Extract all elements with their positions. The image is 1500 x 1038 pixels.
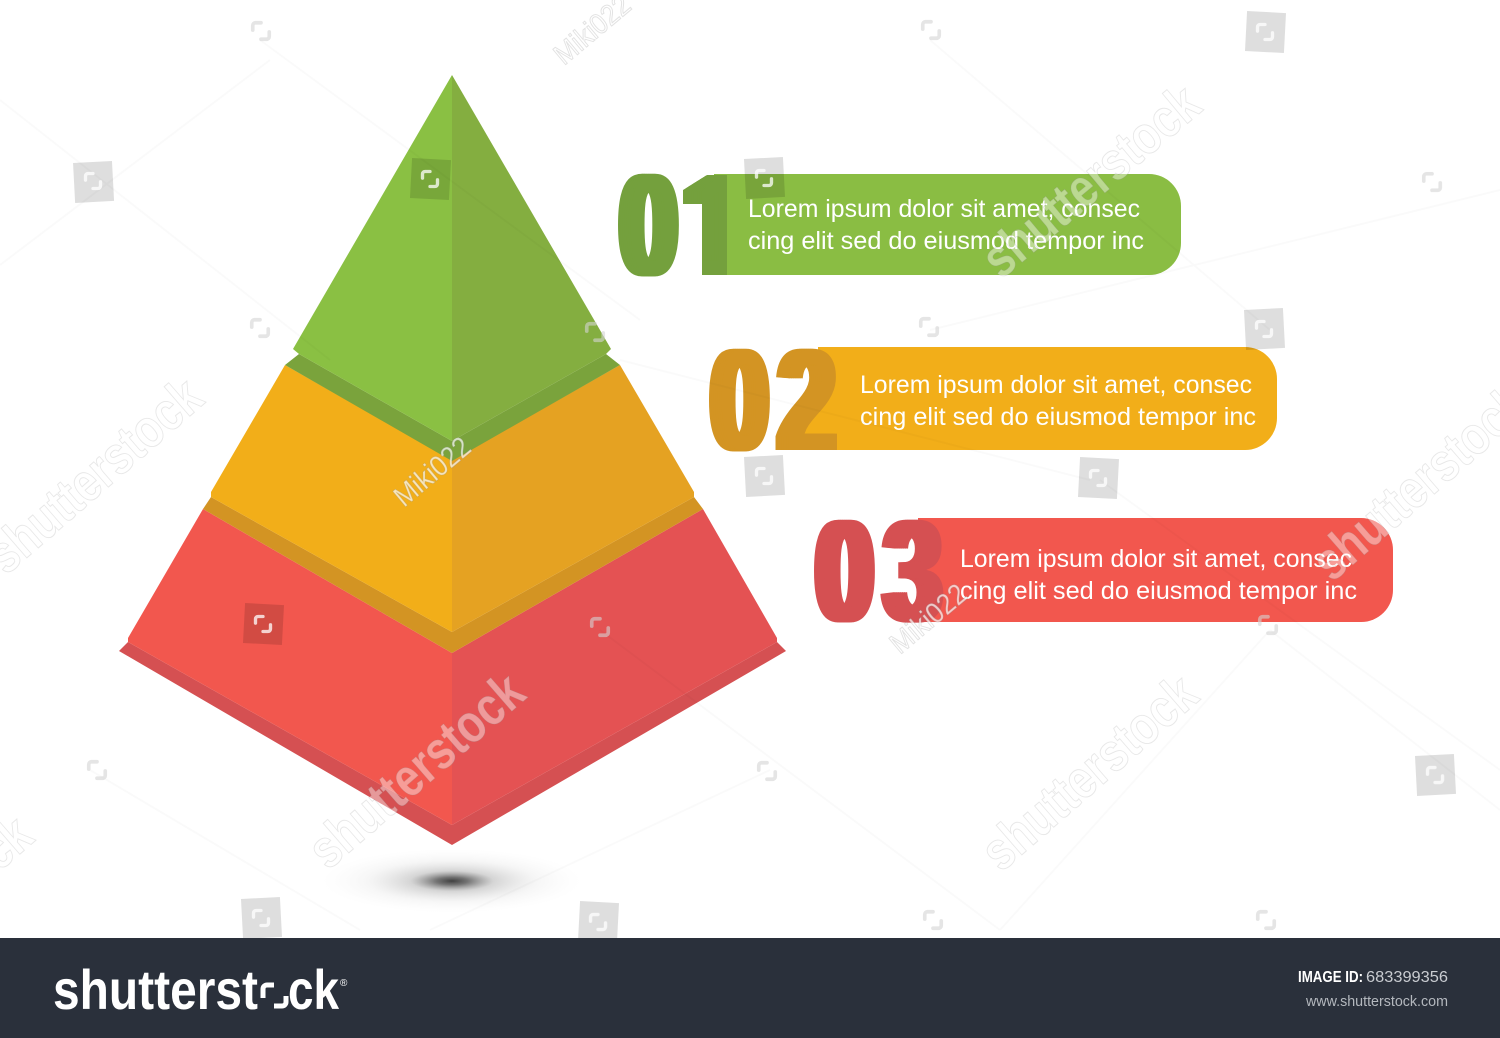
website: www.shutterstock.com xyxy=(1305,993,1448,1010)
watermarks: Miki022 xyxy=(884,578,973,660)
number 02 xyxy=(705,319,841,481)
number 03: 0 xyxy=(810,490,866,652)
footer bar xyxy=(0,938,1500,1038)
number 02: 2 xyxy=(772,319,828,481)
text: Lorem ipsum dolor sit amet, consec xyxy=(860,371,1252,399)
bar xyxy=(714,174,1181,275)
watermarks: shutterstock xyxy=(297,660,536,880)
text: cing elit sed do eiusmod tempor inc xyxy=(960,577,1357,605)
tier 3: red base xyxy=(119,509,786,845)
tier 1: green top xyxy=(285,75,620,461)
text: cing elit sed do eiusmod tempor inc xyxy=(748,227,1144,255)
watermarks: shutterstock xyxy=(970,662,1209,882)
text: Lorem ipsum dolor sit amet, consec xyxy=(748,195,1140,223)
shutterstock logo: shutterst xyxy=(53,958,258,1021)
image id: IMAGE ID: xyxy=(1298,969,1363,986)
floor shadow xyxy=(322,849,582,913)
pyramid xyxy=(119,75,786,913)
number 03 xyxy=(810,490,947,652)
bar xyxy=(918,518,1393,622)
text: cing elit sed do eiusmod tempor inc xyxy=(860,403,1256,431)
number 01: 0 xyxy=(614,144,670,306)
tier 2: orange xyxy=(203,365,703,653)
number 01 xyxy=(618,174,727,276)
bar xyxy=(800,347,1277,450)
callout 02 xyxy=(705,319,1277,481)
number 03: 3 xyxy=(878,490,934,652)
callout 01 xyxy=(618,174,1181,276)
callout 03 xyxy=(810,490,1393,652)
shutterstock logo: ck xyxy=(288,958,340,1021)
number 02: 0 xyxy=(705,319,761,481)
image id: 683399356 xyxy=(1366,969,1448,986)
number 01: 1 xyxy=(682,144,738,306)
shutterstock logo: ® xyxy=(340,978,348,989)
watermarks: Miki022 xyxy=(388,431,477,513)
text: Lorem ipsum dolor sit amet, consec xyxy=(960,545,1352,573)
watermarks: shutterstock xyxy=(970,72,1212,289)
